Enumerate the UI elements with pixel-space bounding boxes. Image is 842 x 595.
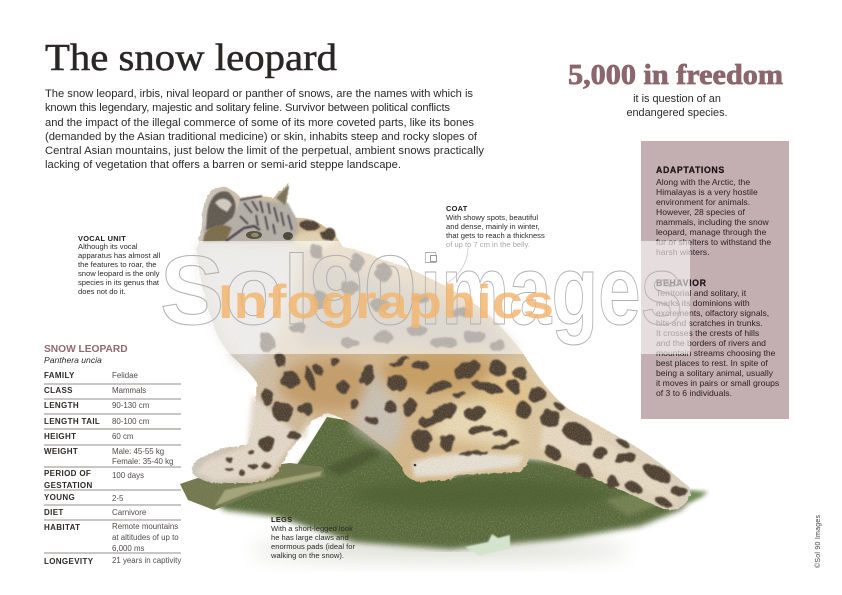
- data table: snow leopard: Male: 45-55 kg: [112, 447, 164, 456]
- callout: vocal unit: snow leopard is the only: [78, 269, 160, 278]
- rosettes and spots: [226, 221, 688, 509]
- callout: vocal unit: Although its vocal: [78, 242, 138, 251]
- data table: snow leopard: 60 cm: [112, 432, 134, 441]
- callout: coat: that gets to reach a thickness: [446, 231, 545, 240]
- data table: snow leopard: YOUNG: [44, 493, 75, 502]
- behavior text: Territorial and solitary, it: [656, 288, 747, 298]
- callout: coat: [446, 204, 545, 249]
- ridge behind the foreleg: [297, 417, 400, 490]
- ground under the leopard: [180, 417, 708, 560]
- adaptations text: Along with the Arctic, the: [656, 177, 750, 187]
- callout: legs: walking on the snow).: [270, 551, 344, 560]
- data table: snow leopard: GESTATION: [44, 481, 93, 490]
- data table: snow leopard: at altitudes of up to: [112, 533, 179, 542]
- data table: snow leopard: DIET: [44, 508, 64, 517]
- headline: 5,000 in freedom: it is question of an: [633, 93, 721, 105]
- speckled grass patch: [180, 463, 325, 510]
- data table: snow leopard: LENGTH: [44, 401, 79, 410]
- intro paragraph: [45, 88, 484, 171]
- adaptations text: fur or shelters to withstand the: [656, 237, 771, 247]
- callout: vocal unit: VOCAL UNIT: [78, 234, 126, 243]
- intro paragraph: (demanded by the Asian traditional medicine) or skin, inhabits steep and rocky slopes of: [45, 131, 478, 143]
- adaptations text: harsh winters.: [656, 247, 710, 257]
- panel: adaptations and behavior: [641, 141, 789, 419]
- body silhouette: [192, 183, 690, 510]
- callout: vocal unit: does not do it.: [78, 287, 126, 296]
- data table: snow leopard: LENGTH TAIL: [44, 417, 100, 426]
- data table: snow leopard: Felidae: [112, 371, 138, 380]
- behavior text: of 3 to 6 individuals.: [656, 388, 732, 398]
- callout: coat: and dense, mainly in winter,: [446, 222, 540, 231]
- behavior text: marks its dominions with: [656, 298, 750, 308]
- cream fur beside the head: [293, 231, 337, 249]
- callout: coat: COAT: [446, 204, 468, 213]
- small leaf: [465, 534, 510, 556]
- data table: snow leopard: Panthera uncia: [44, 355, 102, 365]
- image credit: ©Sol 90 Images: [814, 514, 822, 568]
- data table: snow leopard: 6,000 ms: [112, 544, 145, 553]
- data table: snow leopard: HABITAT: [44, 523, 80, 532]
- behavior text: [656, 278, 779, 398]
- callout: coat: of up to 7 cm in the belly.: [446, 240, 530, 249]
- data table: snow leopard: PERIOD OF: [44, 469, 91, 478]
- data table: snow leopard: WEIGHT: [44, 447, 78, 456]
- adaptations text: However, 28 species of: [656, 207, 745, 217]
- data table: snow leopard: 21 years in captivity: [112, 556, 181, 565]
- data table: snow leopard: CLASS: [44, 386, 73, 395]
- adaptations text: ADAPTATIONS: [656, 165, 725, 175]
- intro paragraph: and the impact of the illegal commerce of some of its more coveted parts, like its bones: [45, 117, 474, 129]
- behavior text: excrements, olfactory signals,: [656, 308, 769, 318]
- callout: coat: With showy spots, beautiful: [446, 213, 538, 222]
- data table: snow leopard: 80-100 cm: [112, 417, 150, 426]
- callout: vocal unit: the features to roar, the: [78, 260, 157, 269]
- snow leopard illustration: [192, 183, 690, 510]
- behavior text: and the borders of rivers and: [656, 338, 766, 348]
- behavior text: it moves in pairs or small groups: [656, 378, 779, 388]
- callout: legs: [270, 515, 355, 560]
- behavior text: hits and scratches in trunks.: [656, 318, 763, 328]
- callout: vocal unit: apparatus has almost all: [78, 251, 161, 260]
- watermark: images: [420, 235, 683, 345]
- behavior text: best places to rest. In spite of: [656, 358, 768, 368]
- adaptations text: Himalayas is a very hostile: [656, 187, 758, 197]
- intro paragraph: The snow leopard, irbis, nival leopard or panther of snows, are the names with which is: [45, 88, 473, 100]
- data table: snow leopard: SNOW LEOPARD: [44, 344, 128, 355]
- watermark: [160, 235, 690, 354]
- data table: snow leopard: LONGEVITY: [44, 557, 94, 566]
- data table: snow leopard: [44, 344, 181, 566]
- callout: legs: he has large claws and: [271, 533, 349, 542]
- intro paragraph: Central Asian mountains, just below the limit of the perpetual, ambient snows practically: [45, 145, 484, 157]
- eyes: [246, 231, 262, 239]
- headline: 5,000 in freedom: endangered species.: [626, 107, 728, 119]
- rear paw claw mark: [414, 464, 416, 466]
- data table: snow leopard: Female: 35-40 kg: [112, 457, 173, 466]
- data table: snow leopard: Remote mountains: [112, 522, 178, 531]
- behavior text: being a solitary animal, usually: [656, 368, 774, 378]
- data table: snow leopard: HEIGHT: [44, 432, 76, 441]
- behavior text: mountain streams choosing the: [656, 348, 776, 358]
- adaptations text: leopard, manage through the: [656, 227, 767, 237]
- data table: snow leopard: 90-130 cm: [112, 401, 150, 410]
- watermark: Infographics: [218, 275, 554, 328]
- data table: snow leopard: Mammals: [112, 386, 146, 395]
- behavior text: It crosses the crests of hills: [656, 328, 759, 338]
- data table: snow leopard: 100 days: [112, 471, 144, 480]
- callout: vocal unit: species in its genus that: [78, 278, 160, 287]
- callout: legs: With a short-legged look: [271, 524, 353, 533]
- head: [203, 185, 298, 243]
- title: The snow leopard: [45, 37, 337, 79]
- shading: grey back: [300, 255, 520, 352]
- callout: legs: LEGS: [271, 515, 292, 524]
- data table: snow leopard: 2-5: [112, 494, 124, 503]
- intro paragraph: lacking of vegetation that offers a barren or semi-arid steppe landscape.: [45, 159, 401, 171]
- headline: 5,000 in freedom: 5,000 in freedom: [568, 59, 783, 91]
- adaptations text: mammals, including the snow: [656, 217, 770, 227]
- data table: snow leopard: FAMILY: [44, 371, 75, 380]
- shading: golden flank: [280, 352, 529, 421]
- behavior text: BEHAVIOR: [656, 278, 707, 288]
- callout: vocal unit: [78, 234, 161, 296]
- intro paragraph: known this legendary, majestic and solitary feline. Survivor between political conflicts: [45, 102, 450, 114]
- watermark: Sol90: [160, 235, 417, 345]
- data table: snow leopard: Carnivore: [112, 508, 147, 517]
- shading: cheek and chest: [200, 245, 300, 367]
- adaptations text: environment for animals.: [656, 197, 750, 207]
- callout: legs: enormous pads (ideal for: [271, 542, 355, 551]
- headline: 5,000 in freedom: [568, 59, 783, 119]
- adaptations text: [656, 165, 771, 257]
